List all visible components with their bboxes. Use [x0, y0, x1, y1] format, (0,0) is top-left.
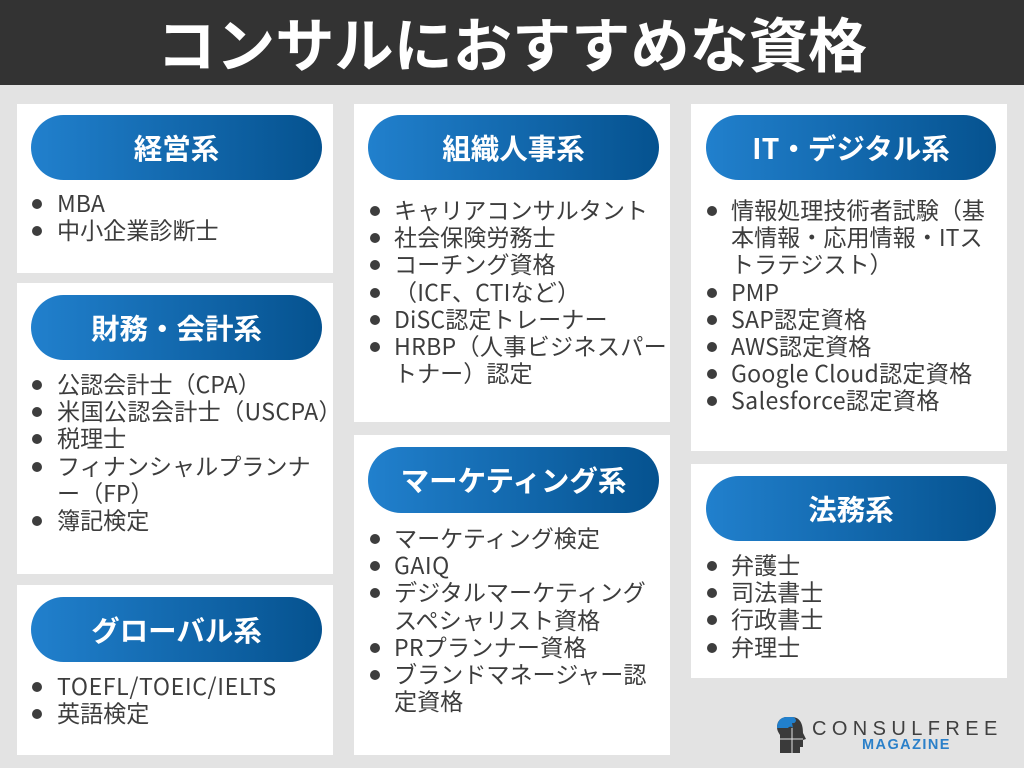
icon: puzzle head: [777, 717, 806, 753]
heading: finance and accounting: 財務・会計系: [91, 307, 262, 348]
heading: legal: 法務系: [808, 488, 894, 529]
list: IT and digital: AWS認定資格: [731, 328, 871, 362]
panel: finance and accounting: [17, 283, 333, 574]
list: organization and HR: トナー）認定: [394, 355, 533, 389]
heading: organization and HR: 組織人事系: [442, 127, 585, 168]
list: finance and accounting: 簿記検定: [57, 502, 149, 536]
list: global: [32, 668, 277, 729]
list: organization and HR: （ICF、CTIなど）: [394, 274, 580, 308]
list: finance and accounting: 米国公認会計士（USCPA）: [57, 393, 342, 427]
list: IT and digital: SAP認定資格: [731, 301, 867, 335]
list: legal: 行政書士: [731, 601, 823, 635]
list: finance and accounting: [32, 366, 342, 536]
list: global: 英語検定: [57, 695, 149, 729]
list: organization and HR: DiSC認定トレーナー: [394, 301, 608, 335]
heading: organization and HR: [368, 115, 659, 180]
heading: management: 経営系: [134, 127, 219, 168]
list: IT and digital: Google Cloud認定資格: [731, 355, 972, 389]
list: finance and accounting: フィナンシャルプランナ: [57, 448, 311, 482]
list: management: MBA: [57, 185, 105, 219]
list: organization and HR: HRBP（人事ビジネスパー: [394, 328, 667, 362]
wordmark: CONSULFREE: CONSULFREE: [812, 718, 1003, 740]
panel: IT and digital: [691, 104, 1007, 451]
list: legal: [707, 547, 823, 663]
list: legal: 弁護士: [731, 547, 800, 581]
list: management: [32, 185, 219, 246]
list: finance and accounting: ー（FP）: [57, 475, 154, 509]
wordmark: MAGAZINE: MAGAZINE: [862, 737, 951, 753]
list: organization and HR: 社会保険労務士: [394, 219, 556, 253]
heading: marketing: マーケティング系: [401, 459, 626, 500]
list: marketing: ブランドマネージャー認: [394, 656, 646, 690]
list: marketing: GAIQ: [394, 547, 450, 581]
list: IT and digital: PMP: [731, 274, 779, 308]
list: IT and digital: トラテジスト）: [731, 246, 893, 280]
panel: marketing: [354, 435, 670, 755]
list: finance and accounting: 公認会計士（CPA）: [57, 366, 261, 400]
list: legal: 司法書士: [731, 574, 823, 608]
list: marketing: デジタルマーケティング: [394, 574, 646, 608]
panel: global: [17, 585, 333, 755]
heading: management: [31, 115, 322, 180]
title banner: [0, 0, 1024, 85]
list: legal: 弁理士: [731, 629, 800, 663]
heading: IT and digital: [706, 115, 996, 180]
heading: IT and digital: IT・デジタル系: [752, 127, 950, 168]
list: IT and digital: 本情報・応用情報・ITス: [731, 219, 983, 253]
heading: finance and accounting: [31, 295, 322, 360]
list: global: TOEFL/TOEIC/IELTS: [57, 668, 277, 702]
list: management: 中小企業診断士: [57, 212, 219, 246]
panel: organization and HR: [354, 104, 670, 422]
heading: marketing: [368, 447, 659, 513]
list: marketing: マーケティング検定: [394, 520, 600, 554]
list: finance and accounting: 税理士: [57, 420, 126, 454]
heading: global: グローバル系: [91, 609, 262, 650]
list: marketing: [370, 520, 646, 717]
list: organization and HR: コーチング資格: [394, 246, 556, 280]
list: organization and HR: キャリアコンサルタント: [394, 192, 648, 226]
heading: legal: [706, 476, 996, 541]
list: marketing: 定資格: [394, 683, 463, 717]
list: IT and digital: Salesforce認定資格: [731, 382, 940, 416]
logo: Consulfree Magazine: [777, 717, 1003, 753]
panel: legal: [691, 464, 1007, 678]
list: marketing: PRプランナー資格: [394, 629, 587, 663]
heading: global: [31, 597, 322, 662]
panel: management: [17, 104, 333, 273]
list: IT and digital: 情報処理技術者試験（基: [731, 192, 985, 226]
list: organization and HR: [370, 192, 667, 389]
list: IT and digital: [707, 192, 985, 416]
title banner: コンサルにおすすめな資格: [157, 0, 867, 85]
list: marketing: スペシャリスト資格: [394, 602, 600, 636]
